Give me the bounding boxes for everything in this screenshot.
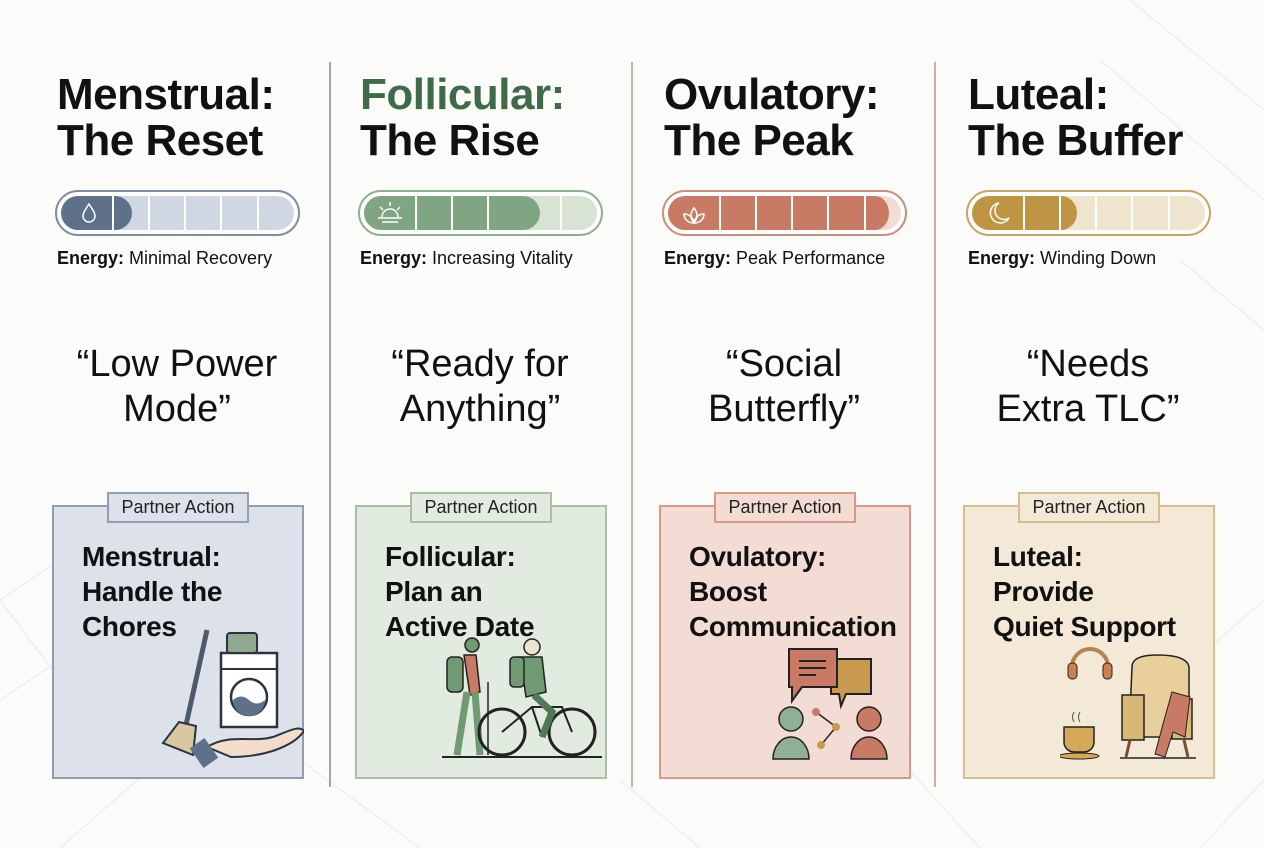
card: partner action [963, 505, 1215, 779]
action title: Chores [82, 611, 177, 642]
energy label: Energy: Peak Performance [664, 248, 885, 268]
action title: Menstrual: [82, 541, 221, 572]
quote [708, 343, 860, 430]
quote: “Needs [1027, 343, 1149, 385]
heading: Luteal: [968, 70, 1109, 119]
card: partner action [52, 505, 304, 779]
action title: Active Date [385, 611, 534, 642]
heading [664, 70, 879, 165]
action title: Quiet Support [993, 611, 1176, 642]
column: luteal [963, 70, 1215, 779]
action title [993, 541, 1176, 642]
card: partner action [355, 505, 607, 779]
quote: Butterfly” [708, 388, 860, 430]
heading [968, 70, 1183, 165]
card: partner action [659, 505, 911, 779]
quote [996, 343, 1180, 430]
energy bar [662, 190, 907, 236]
action title: Communication [689, 611, 897, 642]
energy label: Energy: Winding Down [968, 248, 1156, 268]
energy bar [358, 190, 603, 236]
divider 2 [631, 62, 633, 787]
heading [57, 70, 274, 165]
divider 3 [934, 62, 936, 787]
tab [714, 492, 856, 523]
quote: Anything” [400, 388, 560, 430]
energy label: Energy: Minimal Recovery [57, 248, 272, 268]
icon: conversation [772, 648, 888, 760]
column: follicular [355, 70, 607, 779]
quote: “Social [726, 343, 842, 385]
divider 1 [329, 62, 331, 787]
heading: The Reset [57, 116, 263, 165]
heading: Ovulatory: [664, 70, 879, 119]
tab [410, 492, 552, 523]
icon: hiking and cycling [442, 637, 602, 758]
heading [360, 70, 565, 165]
action title: Boost [689, 576, 767, 607]
action title: Provide [993, 576, 1094, 607]
quote: “Low Power [77, 343, 277, 385]
action title: Luteal: [993, 541, 1083, 572]
tab: Partner Action [424, 497, 538, 517]
action title: Plan an [385, 576, 482, 607]
energy label: Energy: Increasing Vitality [360, 248, 573, 268]
action title: Ovulatory: [689, 541, 826, 572]
action title [82, 541, 222, 642]
quote: Mode” [123, 388, 231, 430]
action title: Handle the [82, 576, 222, 607]
column: ovulatory [659, 70, 911, 779]
heading: The Rise [360, 116, 539, 165]
icon: chores [162, 630, 304, 768]
tab: Partner Action [121, 497, 235, 517]
heading: Follicular: [360, 70, 565, 119]
icon: headphones, tea and armchair [1060, 647, 1196, 760]
tab [107, 492, 249, 523]
quote: Extra TLC” [996, 388, 1180, 430]
tab: Partner Action [1032, 497, 1146, 517]
action title [689, 541, 897, 642]
heading: The Peak [664, 116, 853, 165]
quote: “Ready for [391, 343, 569, 385]
action title: Follicular: [385, 541, 516, 572]
column: menstrual [52, 70, 304, 779]
action title [385, 541, 534, 642]
quote [77, 343, 277, 430]
tab: Partner Action [728, 497, 842, 517]
heading: Menstrual: [57, 70, 274, 119]
energy bar [55, 190, 300, 236]
energy bar [966, 190, 1211, 236]
heading: The Buffer [968, 116, 1183, 165]
quote [391, 343, 569, 430]
tab [1018, 492, 1160, 523]
